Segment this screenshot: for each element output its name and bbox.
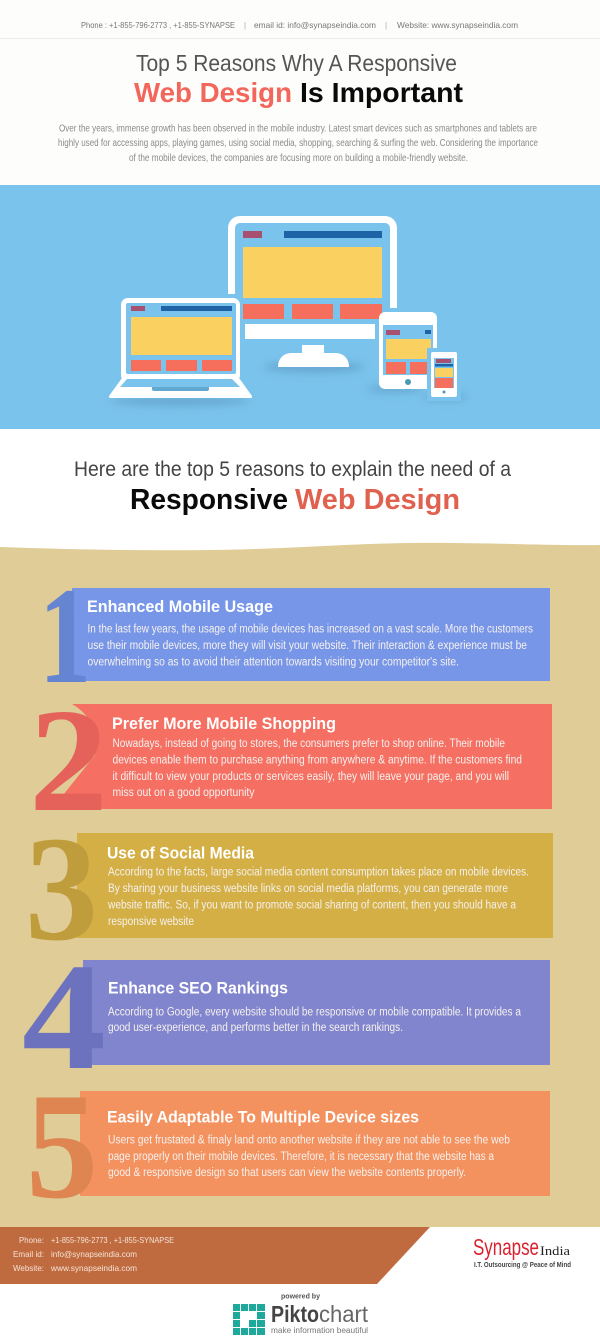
number 1: 1 [39, 559, 91, 712]
title: Is Important [300, 77, 463, 108]
body text: website traffic. So, if you want to promote social sharing of content, then you should have a [107, 900, 517, 912]
SynapseIndia logo: India [540, 1243, 570, 1258]
number 4: 4 [22, 933, 106, 1102]
top contact bar: email id: info@synapseindia.com [254, 20, 376, 30]
panel: reason 5 [26, 1062, 550, 1230]
body text: Users get frustated & finaly land onto another website if they are not able to see the web [108, 1134, 510, 1146]
section heading: Here are the top 5 reasons to explain the need of a [74, 458, 511, 481]
panel: reason 3 [25, 806, 553, 972]
body text: Nowadays, instead of going to stores, the consumers prefer to shop online. Their mobile [112, 738, 505, 750]
panel: reason 4 [22, 933, 550, 1102]
heading: Enhance SEO Rankings [108, 978, 288, 998]
body text: page properly on their mobile devices. Therefore, it is necessary that the website has a [108, 1151, 495, 1163]
title: Web Design [134, 77, 292, 108]
body text [112, 738, 522, 799]
body text [108, 1006, 522, 1034]
body text: good user-experience, and performs better in the search rankings. [108, 1022, 403, 1034]
footer contact band: Website: [13, 1263, 44, 1273]
body text: According to the facts, large social media content consumption takes place on mobile devices. [108, 866, 529, 878]
icon: smartphone [423, 348, 467, 401]
top contact bar: Phone : +1-855-796-2773 , +1-855-SYNAPSE [81, 20, 235, 30]
heading: Enhanced Mobile Usage [87, 597, 273, 616]
body text: overwhelming so as to avoid their attention towards visiting your competitor's site. [88, 656, 459, 668]
heading: Prefer More Mobile Shopping [112, 714, 336, 733]
powered by Piktochart: powered by [281, 1294, 320, 1300]
icon: desktop monitor [220, 216, 405, 373]
heading: Use of Social Media [107, 844, 254, 862]
number 2: 2 [29, 679, 108, 843]
powered by Piktochart [233, 1294, 369, 1335]
body text: use their mobile devices, more they will visit your website. Their interaction & experience must be [88, 640, 527, 652]
SynapseIndia logo [473, 1234, 571, 1269]
hero illustration: responsive devices [0, 185, 600, 429]
section heading: Responsive [130, 484, 288, 516]
icon: laptop [109, 298, 252, 406]
body text: good & responsive design so that users can view the website contents properly. [108, 1167, 466, 1179]
body text: miss out on a good opportunity [112, 787, 255, 799]
number 5: 5 [26, 1062, 98, 1230]
intro paragraph: of the mobile devices, the companies are focusing more on building a mobile-friendly website. [129, 152, 468, 164]
section heading: Web Design [295, 484, 460, 516]
title [134, 50, 463, 108]
SynapseIndia logo: I.T. Outsourcing @ Peace of Mind [474, 1260, 571, 1269]
body text: responsive website [108, 916, 194, 928]
body text: In the last few years, the usage of mobile devices has increased on a vast scale. More the customers [88, 624, 533, 636]
top contact bar: | [244, 21, 246, 30]
body text: By sharing your business website links on social media platforms, you can generate more [108, 883, 508, 895]
SynapseIndia logo: Synapse [473, 1234, 539, 1260]
tan wavy background [0, 543, 600, 1227]
footer contact band: Email id: [13, 1249, 44, 1259]
footer contact band: Phone: [19, 1235, 44, 1245]
footer contact band: www.synapseindia.com [50, 1263, 137, 1273]
powered by Piktochart: Pikto [271, 1301, 319, 1327]
top contact bar: Website: www.synapseindia.com [397, 20, 518, 30]
body text [107, 866, 529, 928]
section heading [74, 458, 511, 516]
icon: tablet [367, 312, 437, 393]
panel: reason 2 [29, 679, 552, 843]
panel: reason 1 [39, 559, 550, 712]
body text: According to Google, every website should be responsive or mobile compatible. It provides a [108, 1006, 522, 1018]
footer contact band [0, 1227, 430, 1284]
title: Top 5 Reasons Why A Responsive [136, 50, 457, 76]
heading: Easily Adaptable To Multiple Device sizes [107, 1108, 419, 1126]
body text: devices enable them to purchase anything from anywhere & anytime. If the customers find [112, 754, 522, 766]
powered by Piktochart: chart [319, 1301, 369, 1327]
intro paragraph [58, 122, 538, 164]
body text: it difficult to view your products or services easily, they will leave your page, and you will [112, 771, 509, 783]
footer contact band: info@synapseindia.com [51, 1249, 137, 1259]
powered by Piktochart: make information beautiful [271, 1326, 368, 1335]
body text [108, 1134, 510, 1179]
body text [88, 624, 533, 668]
footer contact band: +1-855-796-2773 , +1-855-SYNAPSE [51, 1235, 174, 1245]
top contact bar: | [385, 21, 387, 30]
number 3: 3 [25, 806, 98, 972]
icon: Piktochart logo mark [233, 1304, 265, 1335]
top contact bar [81, 20, 518, 30]
